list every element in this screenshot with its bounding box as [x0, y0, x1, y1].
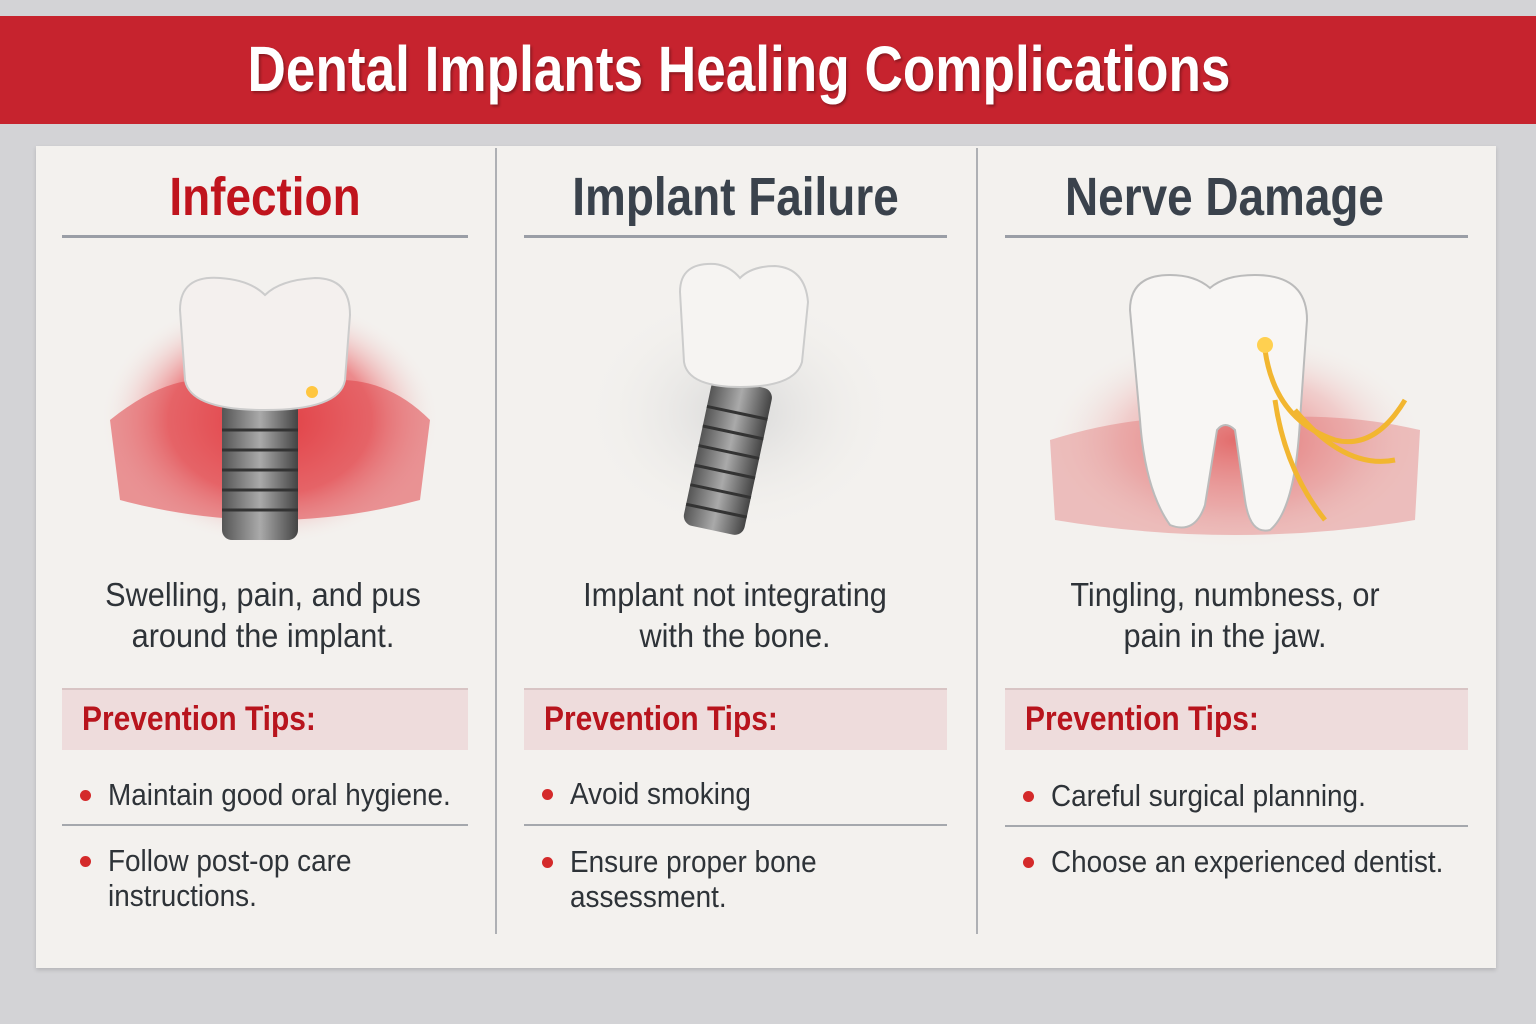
- tip 1: Avoid smoking: [570, 776, 751, 811]
- icon: infected implant: [110, 276, 430, 540]
- icon: failing implant: [667, 262, 812, 535]
- heading: nerve damage: Nerve Damage: [1065, 167, 1384, 227]
- main panel: [36, 146, 1496, 968]
- tip 2: Follow post-op care: [108, 843, 351, 878]
- description: Swelling, pain, and pus: [105, 576, 421, 613]
- tip 1: Careful surgical planning.: [1051, 778, 1366, 813]
- heading: implant failure: Implant Failure: [572, 167, 899, 227]
- description: [583, 576, 887, 654]
- panel: infection: [62, 167, 468, 913]
- tip 2: Ensure proper bone: [570, 844, 817, 879]
- prevention tips: Prevention Tips:: [1025, 700, 1259, 738]
- header banner: [0, 16, 1536, 124]
- panel: nerve damage: [1005, 167, 1468, 879]
- description: Implant not integrating: [583, 576, 887, 613]
- description: pain in the jaw.: [1123, 617, 1327, 654]
- description: with the bone.: [639, 617, 831, 654]
- prevention tips: [1005, 688, 1468, 750]
- prevention tips: [524, 688, 947, 750]
- description: around the implant.: [132, 617, 394, 654]
- tip 2: assessment.: [570, 879, 727, 914]
- tip 2: [62, 843, 379, 913]
- prevention tips: Prevention Tips:: [544, 700, 778, 738]
- tip 2: instructions.: [108, 878, 257, 913]
- description: Tingling, numbness, or: [1070, 576, 1380, 613]
- prevention tips: Prevention Tips:: [82, 700, 316, 738]
- tip 1: Maintain good oral hygiene.: [108, 777, 451, 812]
- tip 2: [524, 844, 844, 914]
- description: [1070, 576, 1380, 654]
- panel: implant failure: [524, 167, 947, 914]
- icon: tooth with nerve: [1050, 274, 1420, 535]
- heading: infection: Infection: [169, 167, 361, 227]
- description: [105, 576, 421, 654]
- tip 2: Choose an experienced dentist.: [1051, 844, 1443, 879]
- title: Dental Implants Healing Complications: [248, 33, 1230, 105]
- prevention tips: [62, 688, 468, 750]
